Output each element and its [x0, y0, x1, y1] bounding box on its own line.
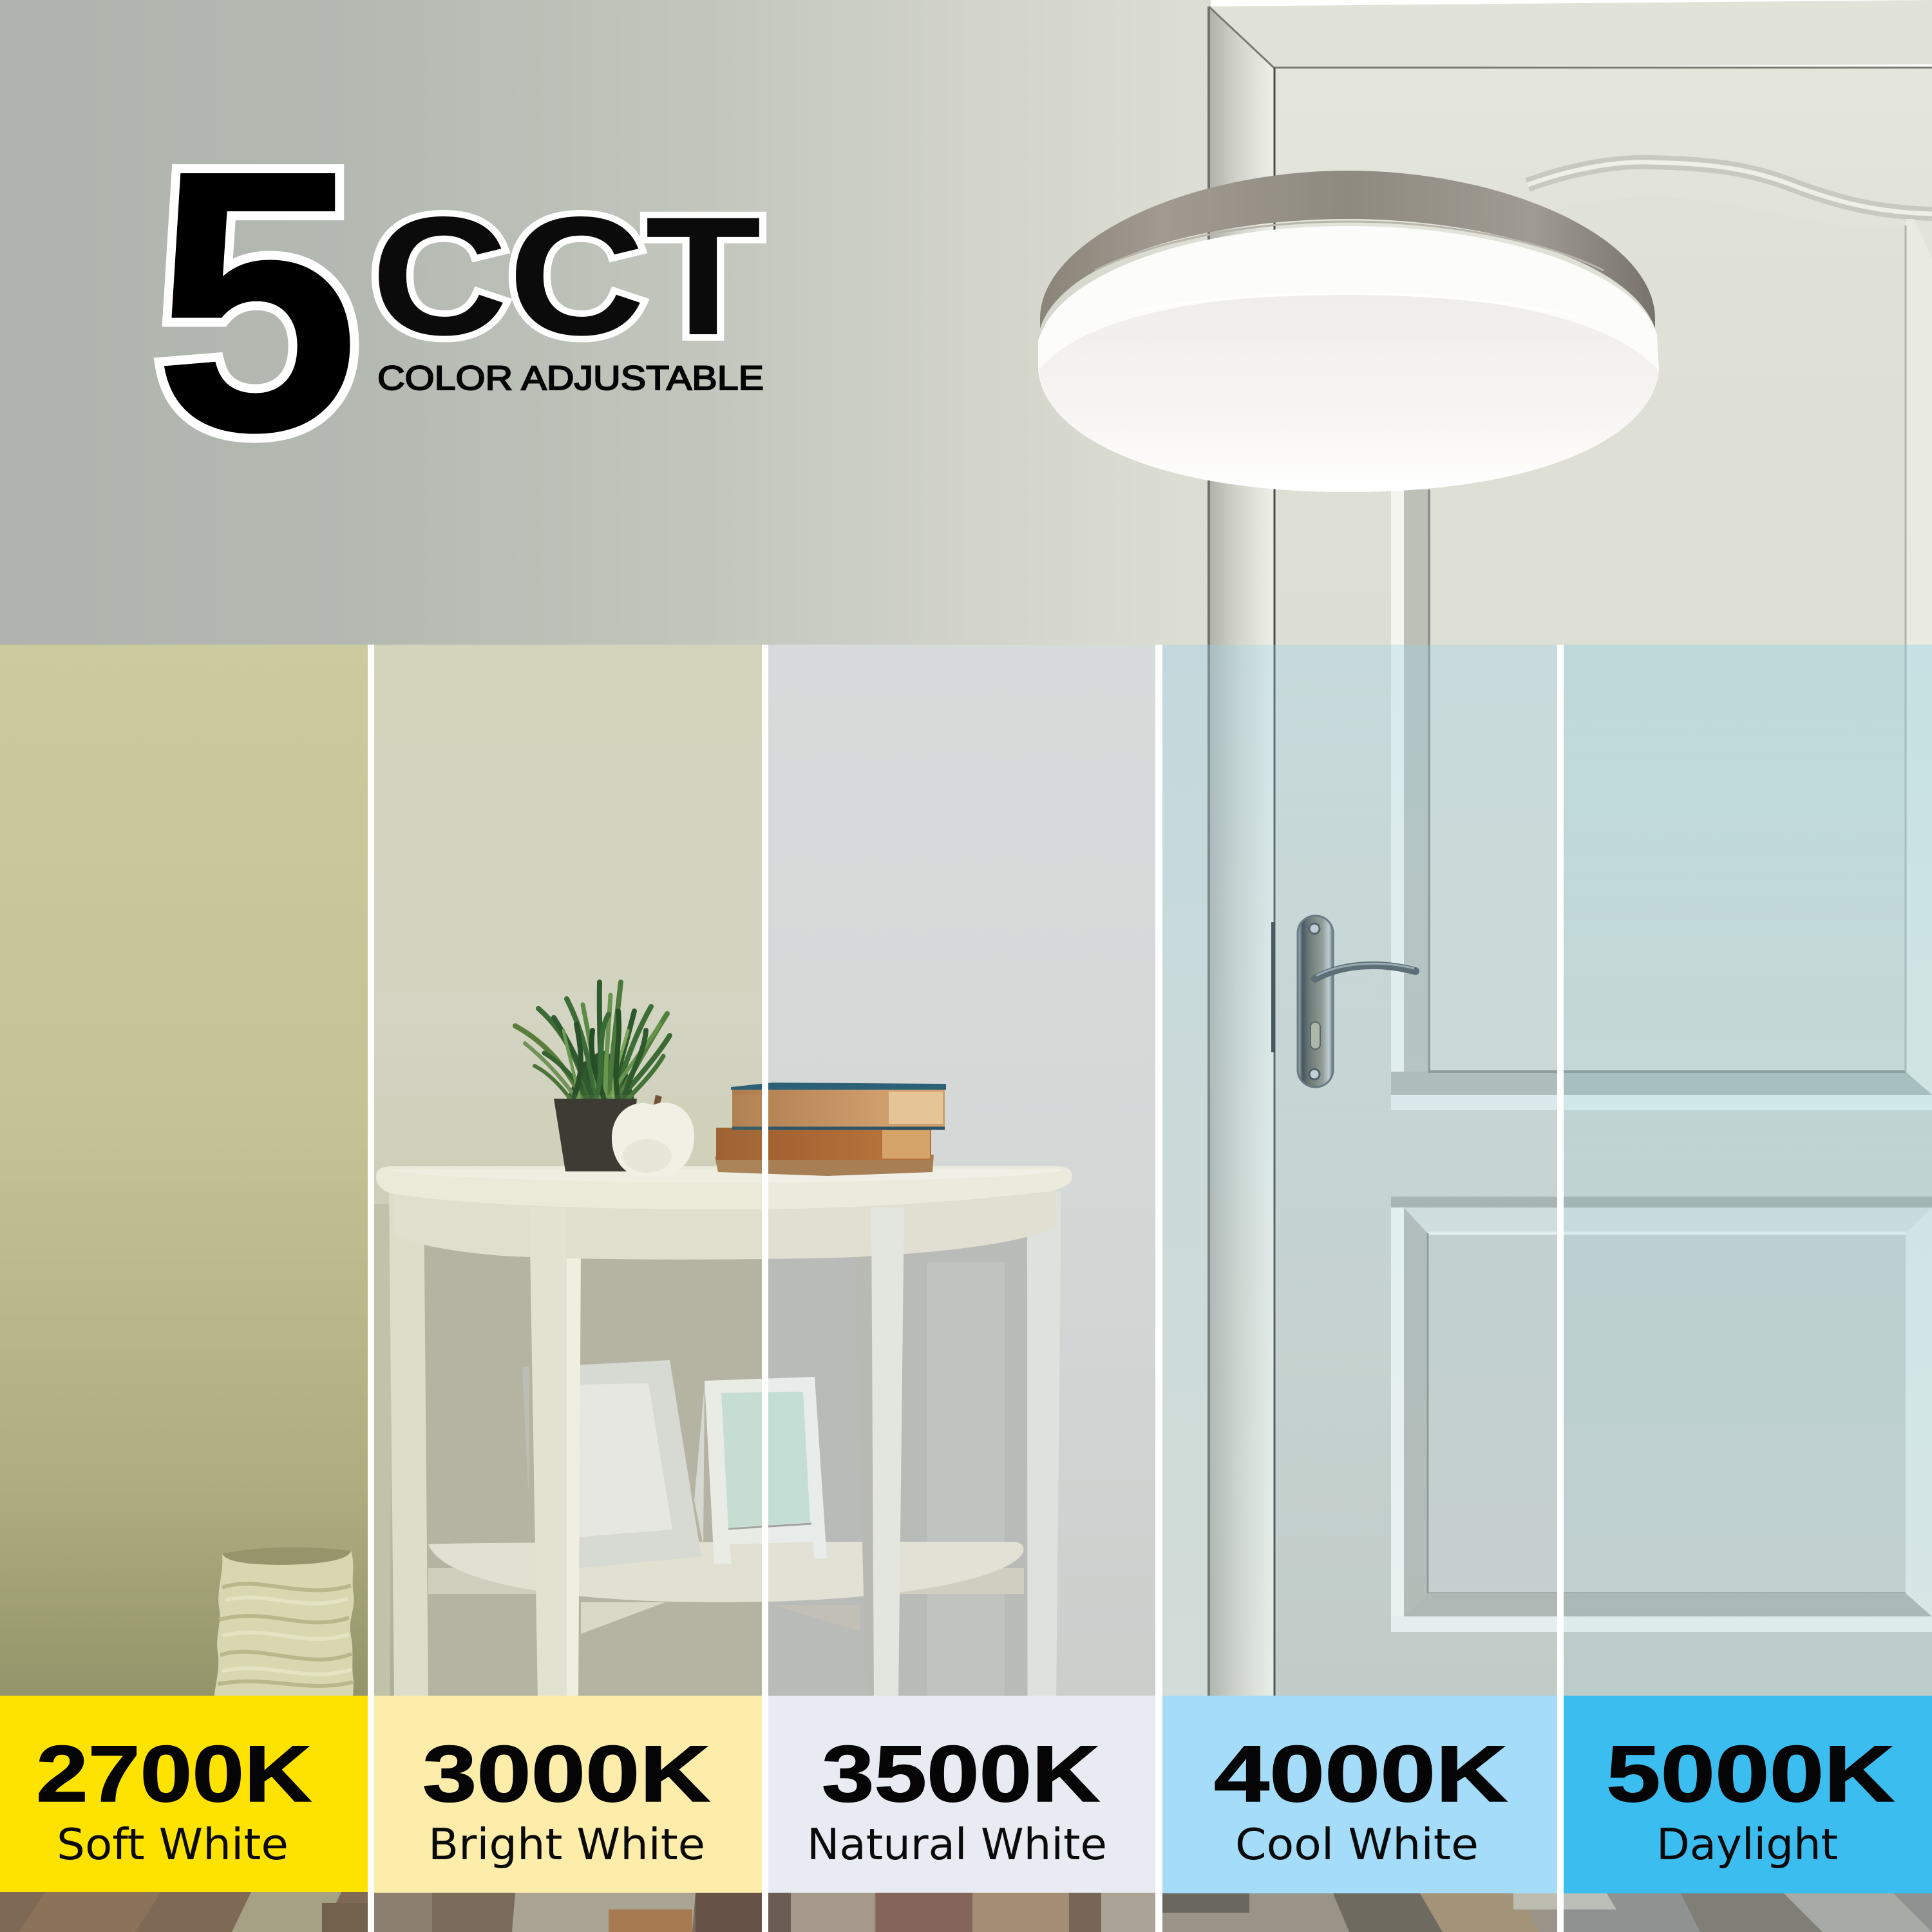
- panel: 4000K Cool White: [1162, 1696, 1557, 1893]
- floor: 5000K: [1564, 1893, 1932, 1932]
- vase: [214, 1547, 354, 1700]
- casing top: [1209, 0, 1932, 68]
- brushed nickel rim: [1040, 171, 1655, 328]
- panel: 2700K Soft White: [0, 1696, 368, 1892]
- casing side: [1209, 6, 1274, 1700]
- door gap lines: [1208, 6, 1210, 1700]
- door and casing: [1209, 0, 1932, 1700]
- ceiling light fixture: [1038, 171, 1659, 492]
- right front leg: [871, 1208, 904, 1700]
- wall: 2700K column: [0, 645, 368, 1701]
- right front leg shaded face: [855, 1256, 874, 1700]
- wall shadow left of table: [374, 1204, 390, 1700]
- outer left leg: [389, 1191, 428, 1700]
- subtitle: COLOR ADJUSTABLE: [377, 359, 764, 397]
- panel: 2700K Soft White: Soft White: [57, 1819, 289, 1870]
- keyhole: [1311, 1022, 1320, 1049]
- console table: [374, 982, 1072, 1700]
- screw top: [1309, 923, 1320, 934]
- panel: 4000K Cool White: Cool White: [1235, 1819, 1479, 1870]
- panel: 5000K Daylight: [1564, 1696, 1932, 1893]
- panel: 3000K Bright White: [374, 1696, 762, 1893]
- tint overlay: 4000K: [1162, 645, 1557, 1701]
- opal glass shade: [1038, 226, 1659, 492]
- shade highlight: [1133, 294, 1578, 317]
- soft light on wall inside table: [927, 1262, 1005, 1700]
- wall: 3000K column: [374, 645, 762, 1701]
- wall: neutral upper band: [0, 0, 1211, 645]
- panel: 3500K Natural White: [768, 1696, 1155, 1893]
- apron: [393, 1188, 1056, 1260]
- door leaf: [1274, 68, 1932, 1700]
- floor: 3000K: [374, 1893, 762, 1932]
- panel: 3000K Bright White: 3000K: [422, 1730, 710, 1819]
- shade lower face: [1039, 294, 1658, 492]
- panel: 4000K Cool White: 4000K: [1214, 1730, 1508, 1819]
- outer right leg: [1027, 1191, 1061, 1700]
- silver picture frame: [522, 1360, 701, 1569]
- panel: 3000K Bright White: Bright White: [428, 1819, 705, 1870]
- middle book: [716, 1128, 931, 1160]
- tint overlay: 5000K: [1564, 645, 1932, 1701]
- wall: 4000K column strip: [1162, 645, 1211, 1701]
- left front leg inner face: [565, 1249, 581, 1700]
- panel: 3500K Natural White: Natural White: [807, 1819, 1107, 1870]
- panel: 2700K Soft White: 2700K: [36, 1730, 312, 1819]
- top door panel moulding: [1391, 162, 1932, 1110]
- floor: 4000K: [1162, 1893, 1557, 1932]
- white ceramic apple: [612, 1095, 694, 1177]
- interior shadow: [422, 1224, 1027, 1700]
- lower door panel: [1391, 1197, 1932, 1632]
- big numeral 5: 5: [153, 92, 361, 509]
- floor planks: [0, 1892, 1932, 1932]
- rim lip: [1095, 222, 1604, 270]
- plant leaves: [515, 982, 670, 1099]
- left front leg: [529, 1208, 567, 1700]
- wall: 3500K column: [768, 645, 1155, 1701]
- lever: [1315, 965, 1416, 979]
- white column dividers: [368, 645, 1564, 1932]
- top book pages: [732, 1088, 945, 1128]
- CCT wordmark: CCT: [371, 182, 761, 370]
- glass picture frame: [694, 1377, 827, 1564]
- plant pot: [554, 1099, 637, 1171]
- panel: 3500K Natural White: 3500K: [822, 1730, 1100, 1819]
- panel: 5000K Daylight: 5000K: [1606, 1730, 1895, 1819]
- table top: [376, 1166, 1072, 1209]
- heading: 5 CCT Color Adjustable: [153, 92, 764, 509]
- floor: 3500K: [768, 1893, 1155, 1932]
- top book cover: [731, 1083, 946, 1090]
- floor: 2700K: [0, 1892, 368, 1932]
- lower shelf: [428, 1542, 1024, 1634]
- stack of books: [715, 1083, 946, 1176]
- interior shadow: 3500K side: [768, 1224, 1027, 1700]
- back plate: [1298, 916, 1333, 1087]
- bottom book: [715, 1155, 934, 1176]
- panel: 5000K Daylight: Daylight: [1656, 1819, 1838, 1870]
- tint overlay: 3000K: [374, 1095, 762, 1700]
- screw bottom: [1309, 1069, 1320, 1079]
- colour temperature bars: [0, 1696, 1932, 1893]
- door handle: [1271, 916, 1416, 1087]
- strike: [1271, 922, 1275, 1052]
